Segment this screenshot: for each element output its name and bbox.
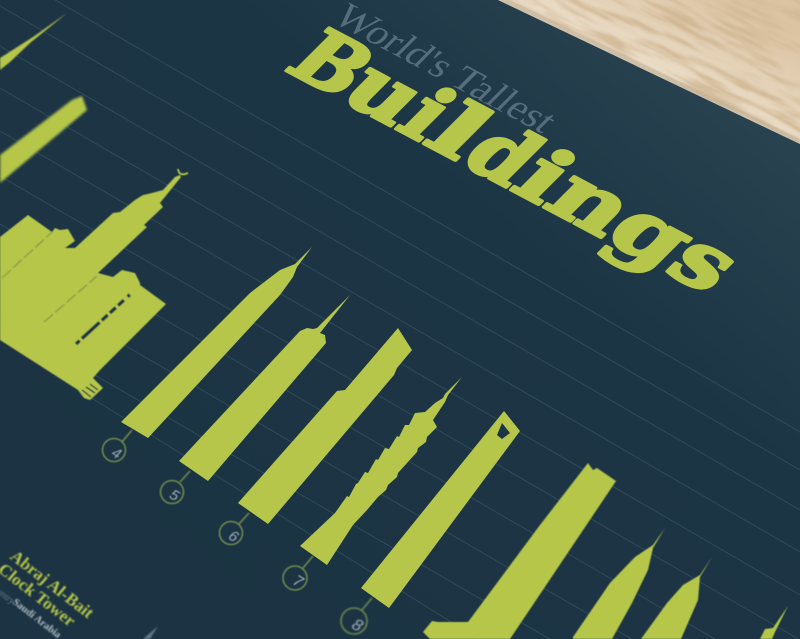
subtitle: World's Tallest: World's Tallest xyxy=(325,0,567,140)
marker 7 xyxy=(283,556,313,590)
heading: Buildings: n xyxy=(526,151,658,253)
heading: Buildings: i xyxy=(494,134,595,220)
heading: Buildings xyxy=(268,13,763,309)
building: top-left spire (cropped) xyxy=(0,13,67,70)
building 9 xyxy=(423,463,616,639)
tower windows xyxy=(76,290,135,344)
building 8 xyxy=(361,411,520,608)
marker 6: 6 xyxy=(224,529,242,545)
next caption spire (blurred) xyxy=(143,626,158,639)
heading: Buildings: u xyxy=(323,43,448,142)
heading: Buildings: B xyxy=(269,13,395,113)
marker 7: 7 xyxy=(288,573,307,590)
heading: Buildings: s xyxy=(648,215,763,308)
marker 8: 8 xyxy=(347,616,368,635)
marker 5: 5 xyxy=(165,488,183,504)
building 10 xyxy=(573,528,665,639)
marker 4 xyxy=(102,430,132,462)
rank markers xyxy=(102,430,372,635)
caption: Abraj Al-Bait Clock Tower: Abraj Al-Bait xyxy=(6,546,98,622)
marker 4: 4 xyxy=(107,446,125,462)
building 12 xyxy=(760,606,788,639)
building: Abraj Al-Bait Clock Tower xyxy=(0,169,188,400)
marker 5 xyxy=(160,471,190,504)
heading: Buildings: g xyxy=(588,184,717,284)
heading: Buildings: l xyxy=(407,87,513,175)
building 7 xyxy=(300,377,462,565)
building 11 xyxy=(641,557,712,639)
building: second tower (cropped) xyxy=(0,96,87,183)
title xyxy=(268,0,763,309)
wooden table corner xyxy=(498,0,800,144)
icon: crescent xyxy=(178,169,188,174)
marker 8 xyxy=(341,598,372,635)
heading: Buildings: d xyxy=(444,108,562,203)
marker 6 xyxy=(220,513,249,545)
building 4 xyxy=(121,247,312,438)
building 6 xyxy=(238,328,412,524)
building 5 xyxy=(179,295,350,481)
heading: Buildings: i xyxy=(379,73,475,156)
